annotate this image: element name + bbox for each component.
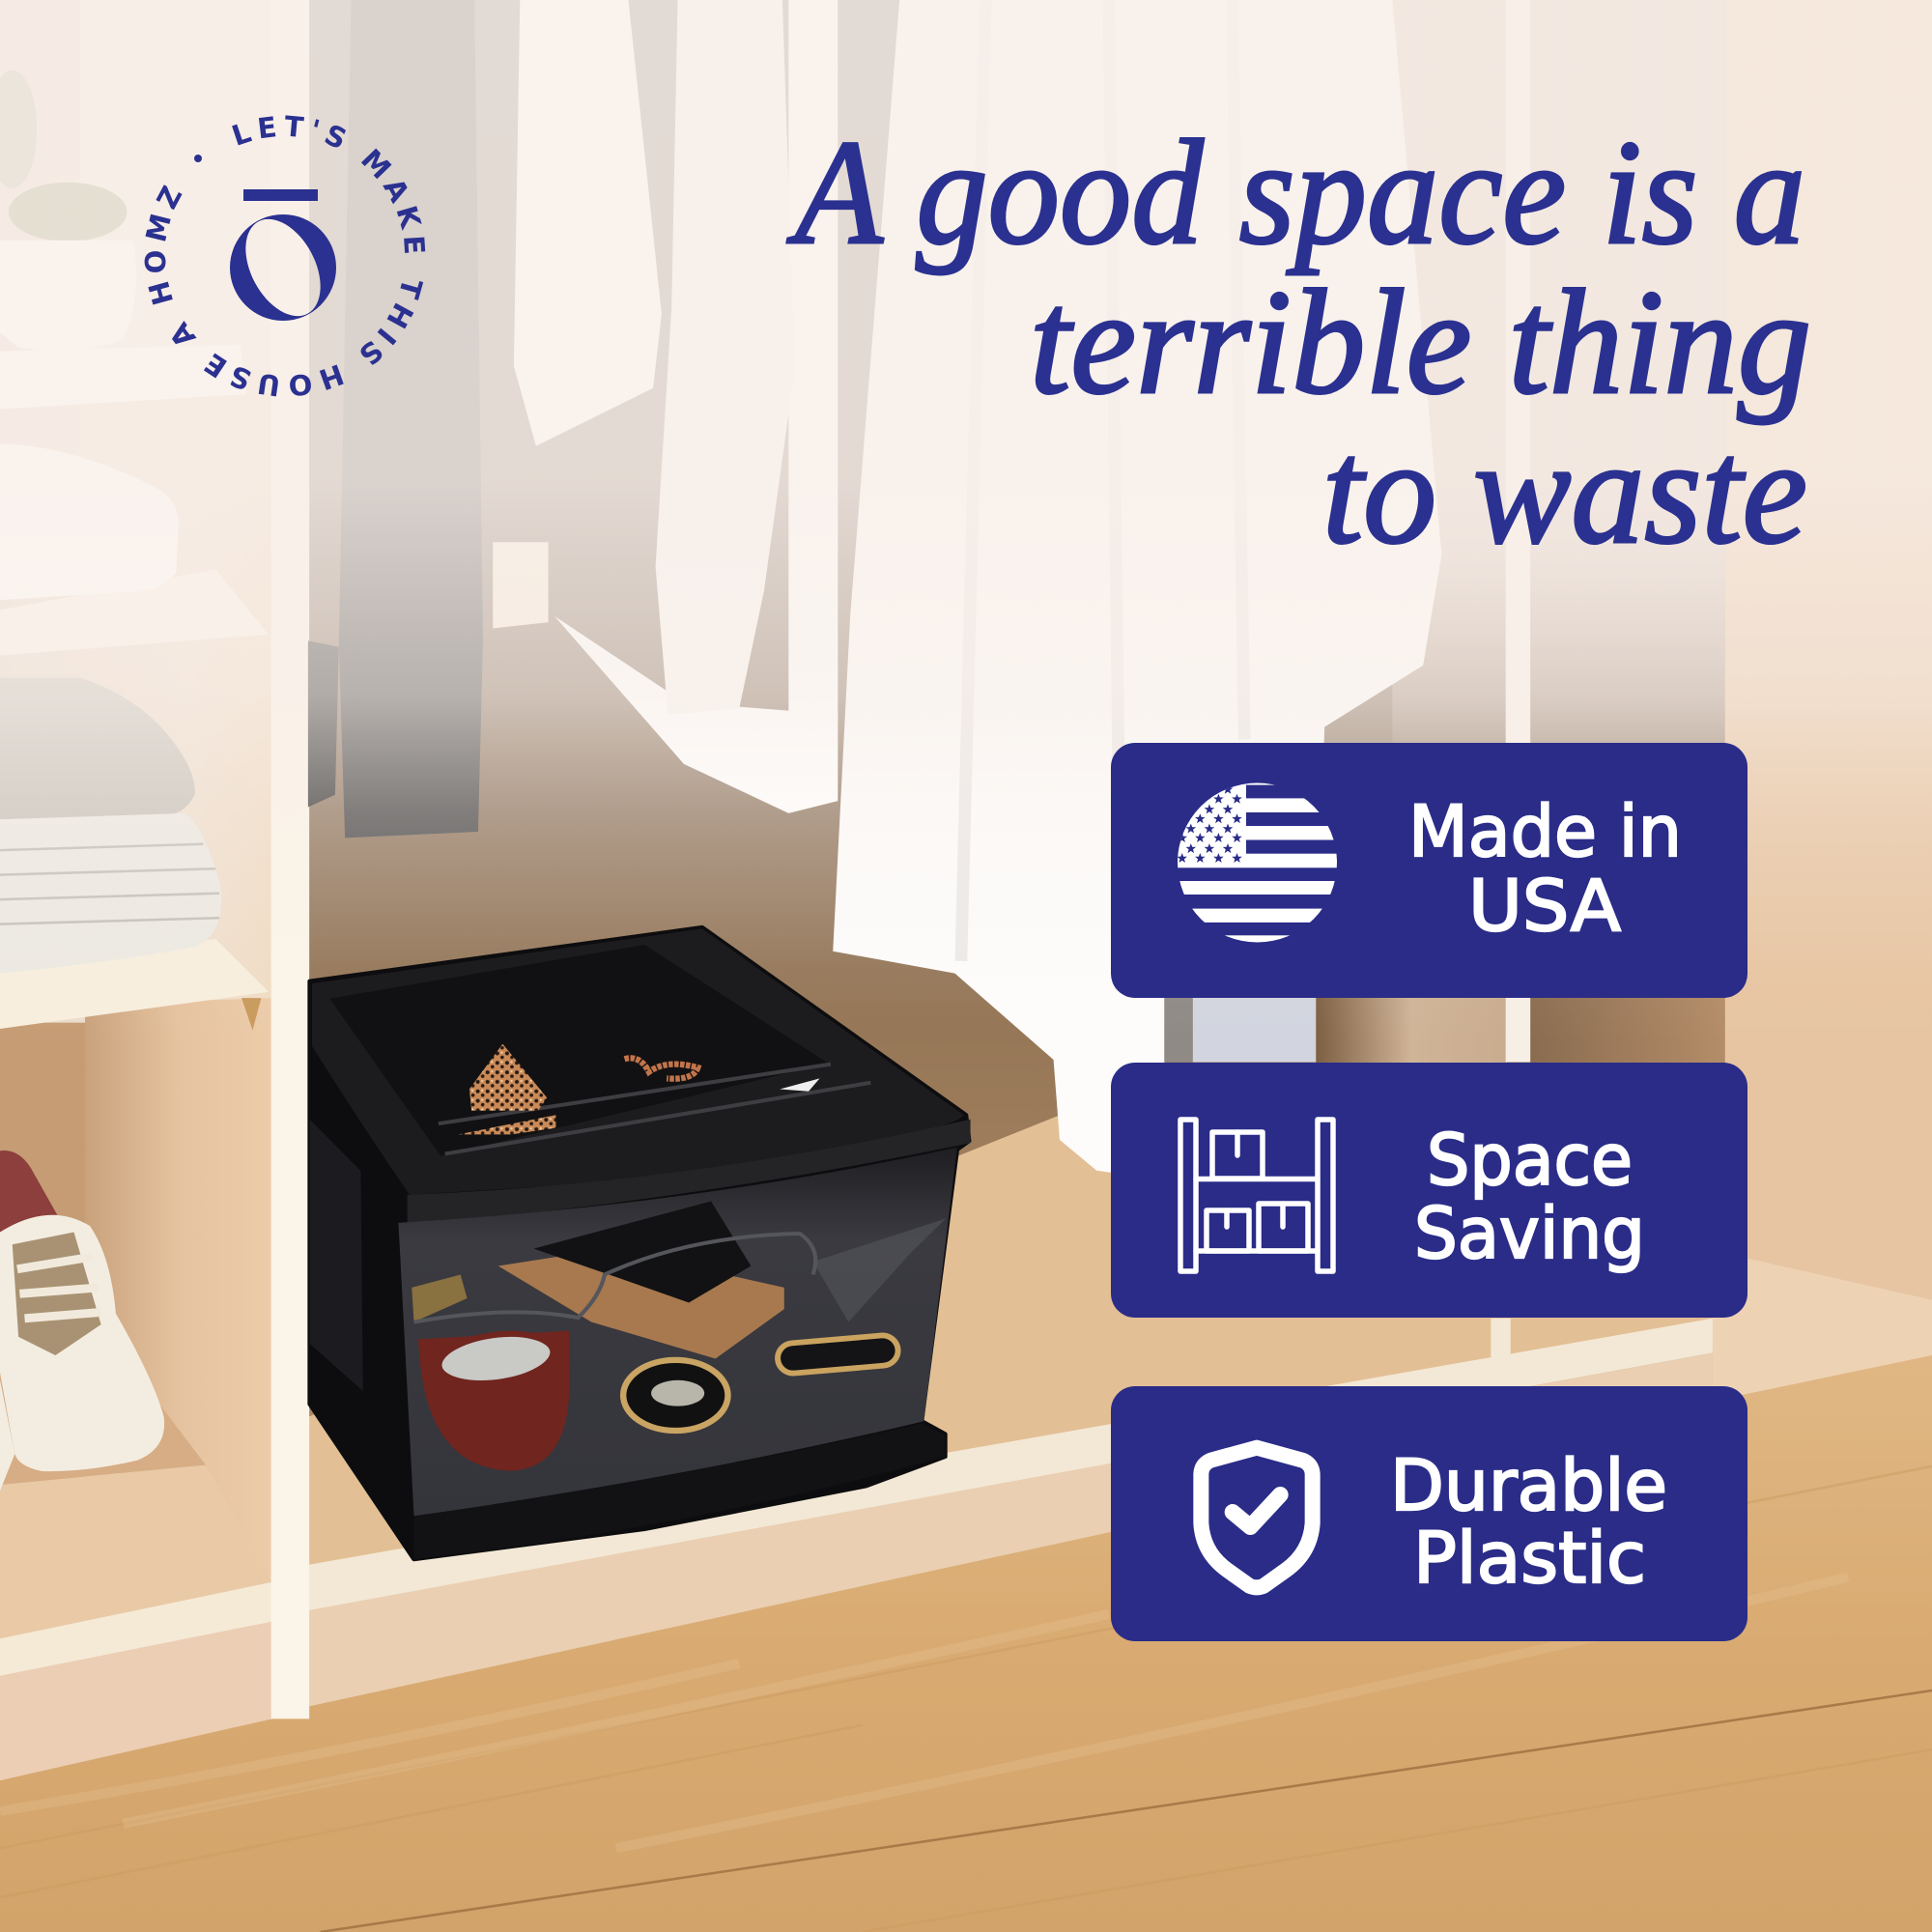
drawer front rim <box>408 1120 971 1225</box>
vertical post <box>271 0 309 1719</box>
headline: A good space is a <box>786 109 1805 275</box>
folded towels <box>0 443 221 974</box>
drawer top <box>312 928 964 1195</box>
logo ring text <box>165 136 405 376</box>
headline: to waste <box>1322 409 1807 575</box>
base lip <box>414 1423 945 1559</box>
label: durable plastic <box>1390 1445 1667 1600</box>
label: made in USA: Made in <box>1408 791 1682 873</box>
logo mark <box>243 189 318 201</box>
box contents <box>498 1249 784 1358</box>
label: space saving: Saving <box>1414 1193 1645 1275</box>
closet floor <box>308 1115 1725 1602</box>
base trim <box>308 1319 1713 1610</box>
headline <box>786 109 1811 575</box>
shoes <box>0 1151 164 1491</box>
headline: terrible thing <box>1030 259 1811 425</box>
drawer window <box>398 1148 957 1516</box>
label: durable plastic: Durable <box>1390 1445 1667 1527</box>
label: durable plastic: Plastic <box>1413 1518 1646 1600</box>
gold medallion <box>623 1360 727 1431</box>
wood floor <box>0 1355 1932 1932</box>
label: made in USA <box>1408 791 1682 948</box>
right side wall <box>1725 0 1932 1306</box>
hanging clothes <box>308 0 1530 1368</box>
label: space saving <box>1414 1120 1645 1275</box>
icon: shield with check <box>1201 1448 1313 1587</box>
panel: durable plastic <box>1111 1386 1747 1641</box>
panel: made in USA <box>1111 743 1747 998</box>
logo: circular badge: LET'S MAKE THIS HOUSE A HOMZ <box>145 115 425 396</box>
icon: shelf with boxes <box>1180 1120 1333 1271</box>
label: made in USA: USA <box>1468 866 1621 948</box>
left shelving unit <box>0 0 272 1029</box>
product: black storage drawer <box>310 927 971 1559</box>
icon: US flag <box>1174 782 1343 944</box>
label: space saving: Space <box>1427 1120 1633 1202</box>
panel: space saving <box>1111 1063 1747 1318</box>
jewelry on top <box>458 1044 820 1134</box>
gold clasp <box>777 1334 899 1375</box>
potted plant <box>0 71 136 351</box>
